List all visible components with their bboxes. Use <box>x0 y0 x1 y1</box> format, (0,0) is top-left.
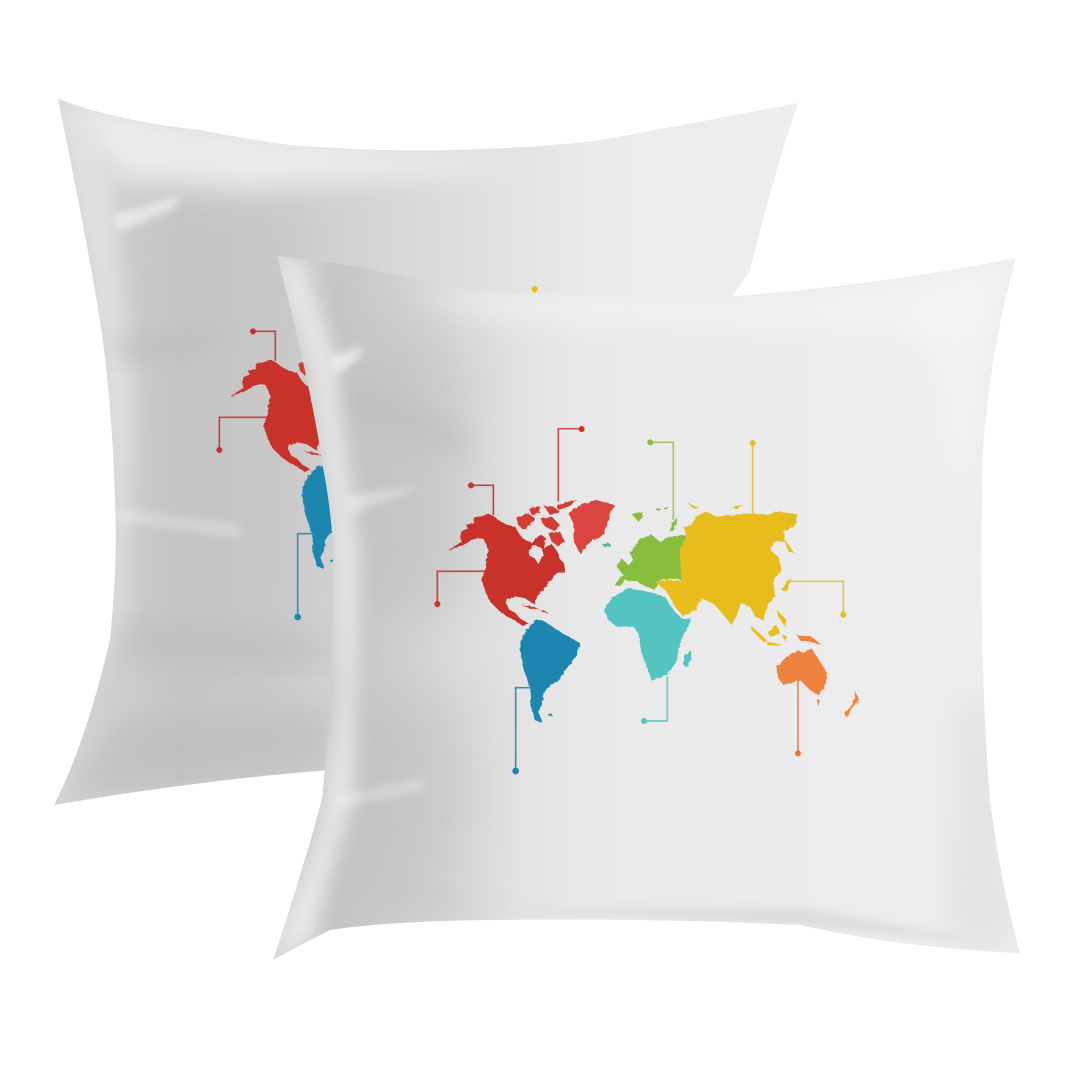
front pillow shading <box>275 256 1016 960</box>
back pillow map <box>216 286 538 620</box>
back pillow <box>40 90 820 820</box>
front pillow <box>260 250 1030 970</box>
front pillow map <box>434 426 859 774</box>
back pillow body <box>40 90 820 820</box>
scene: two throw pillows with a world map <box>54 99 1020 960</box>
back pillow shading <box>60 95 540 800</box>
front pillow body <box>260 250 1030 970</box>
